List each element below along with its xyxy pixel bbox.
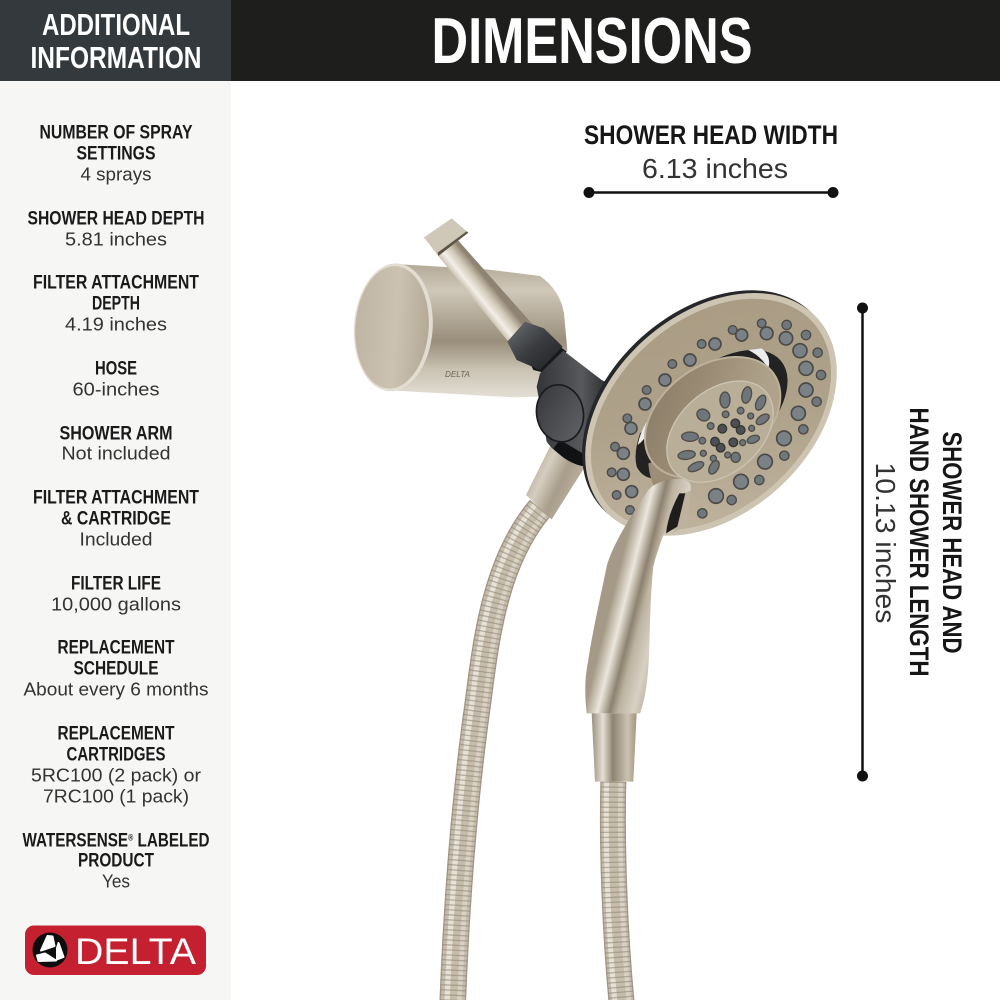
shower arm (424, 218, 532, 342)
spec: replacement cartridges: 7RC100 (1 pack) (43, 786, 189, 807)
spec: replacement cartridges: REPLACEMENT (58, 723, 175, 745)
spec: hose: HOSE (95, 358, 137, 380)
logo: delta (25, 926, 206, 975)
left crescent of ring opening (636, 427, 657, 478)
header: additional information (0, 0, 231, 81)
spec: filter attachment and cartridge (33, 487, 199, 550)
head back rim (535, 242, 881, 581)
spec: filter attachment depth: 4.19 inches (65, 314, 167, 335)
hand shower body (622, 332, 803, 503)
hand shower spray face (647, 361, 793, 503)
spec: shower arm: Not included (62, 443, 170, 464)
handle slot (666, 493, 685, 533)
shower head (535, 242, 884, 585)
dimension line: width (584, 187, 838, 198)
logo: delta: DELTA (75, 931, 196, 972)
background seen through opening (638, 348, 769, 445)
callout: shower head width: 6.13 inches (642, 153, 788, 184)
spec: filter life (51, 573, 181, 615)
spec: number of spray settings (40, 122, 192, 185)
spec: filter life: 10,000 gallons (51, 594, 181, 615)
spec: number of spray settings: NUMBER OF SPRAY (40, 122, 192, 144)
callout: shower head width (584, 120, 838, 198)
text block: specifications list (22, 122, 210, 892)
spec: filter attachment and cartridge: Included (80, 529, 152, 550)
outer ring nozzles small (607, 319, 826, 518)
spec: replacement schedule: SCHEDULE (74, 658, 158, 680)
spec: shower head depth: 5.81 inches (65, 229, 167, 250)
callout: shower head and hand shower length: HAND SHOWER LENGTH (904, 408, 934, 676)
black swivel joint (507, 322, 612, 467)
title: dimensions (231, 0, 1000, 81)
spec: filter attachment depth: DEPTH (92, 293, 140, 315)
hose: lower right (606, 782, 629, 1000)
spec: shower head depth: SHOWER HEAD DEPTH (28, 208, 204, 230)
spec: replacement schedule: About every 6 months (24, 679, 208, 700)
spec: hose (72, 358, 160, 400)
spec: replacement cartridges: 5RC100 (2 pack) or (31, 765, 201, 786)
callout: shower head and hand shower length: 10.13 inches (870, 462, 901, 624)
spec: watersense labeled product (22, 830, 210, 892)
spec: shower arm: SHOWER ARM (60, 423, 172, 445)
callout: shower head and hand shower length: SHOWER HEAD AND (937, 432, 967, 654)
spec: number of spray settings: SETTINGS (76, 143, 156, 165)
hand shower handle (585, 478, 691, 713)
spec: filter attachment and cartridge: FILTER ATTACHMENT (33, 487, 199, 509)
spec: filter attachment depth: FILTER ATTACHMENT (33, 272, 199, 294)
spec: watersense labeled product: WATERSENSE (22, 830, 158, 852)
hose: left loop (447, 505, 546, 1000)
spec: hose: 60-inches (72, 379, 160, 400)
spec: watersense labeled product: PRODUCT (78, 850, 154, 872)
header: additional information: INFORMATION (30, 40, 202, 75)
outer ring nozzles large (617, 327, 813, 503)
spec: shower arm (60, 423, 172, 464)
handle collar (592, 713, 637, 782)
callout: shower head and hand shower length (857, 302, 967, 782)
brand mark on filter: DELTA (445, 370, 470, 379)
dimension line: length (857, 302, 868, 782)
header: additional information: ADDITIONAL (42, 7, 190, 42)
callout: shower head width: SHOWER HEAD WIDTH (584, 120, 838, 150)
ring lip (670, 491, 691, 534)
product: shower head with filter and hose (350, 218, 884, 1000)
spec: replacement schedule: REPLACEMENT (58, 637, 175, 659)
spec: filter life: FILTER LIFE (71, 573, 161, 595)
spec: filter attachment depth (33, 272, 199, 335)
filter attachment body (350, 261, 567, 397)
title: dimensions: DIMENSIONS (432, 4, 752, 77)
spec: watersense labeled product: Yes (102, 871, 130, 892)
spec: replacement schedule (24, 637, 208, 700)
spec: number of spray settings: 4 sprays (80, 164, 152, 185)
ring opening (619, 324, 811, 508)
spec: filter attachment and cartridge: & CARTRIDGE (61, 508, 171, 530)
spec: replacement cartridges (31, 723, 201, 807)
panel: sidebar background (0, 81, 231, 1000)
spec: shower head depth (28, 208, 204, 250)
spec: watersense labeled product: ® (128, 833, 134, 843)
hose mount tube (526, 445, 585, 519)
head outer ring (538, 244, 884, 585)
hand shower nozzles (677, 386, 771, 476)
spec: replacement cartridges: CARTRIDGES (66, 744, 166, 766)
spec: watersense labeled product: LABELED (133, 830, 210, 852)
hand shower neck (648, 453, 688, 490)
